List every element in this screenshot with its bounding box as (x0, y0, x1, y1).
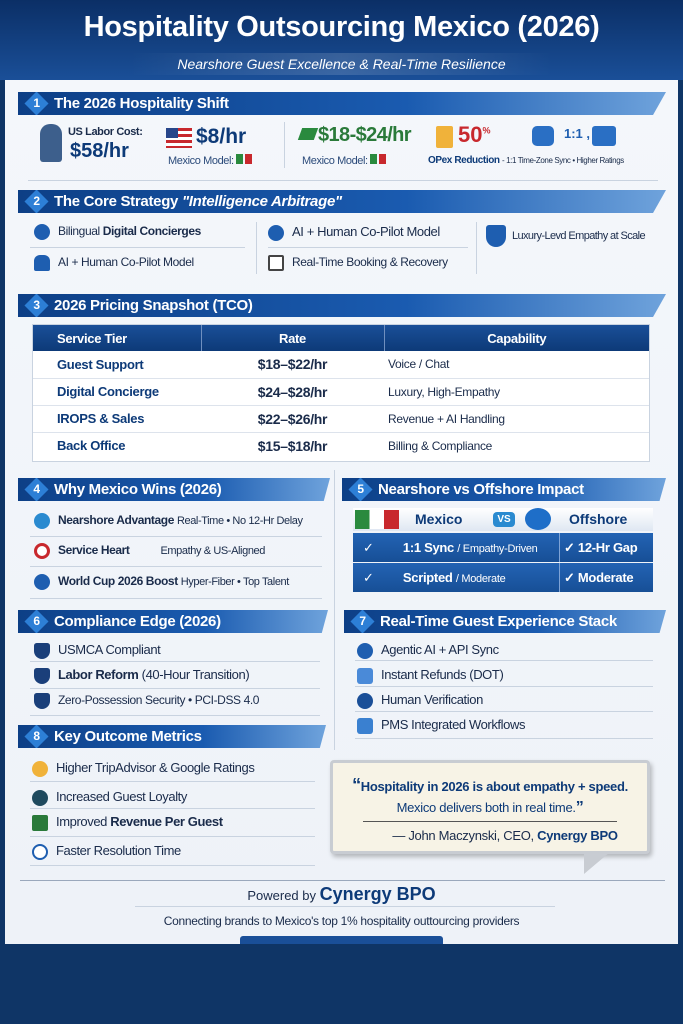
pricing table: Back Office (57, 438, 125, 453)
row: scripted: ✓ Scripted / Moderate (363, 570, 505, 585)
pricing table: Capability (487, 330, 546, 346)
comparison table (353, 508, 653, 592)
section 1 stats: Mexico Model: (302, 155, 368, 167)
item: world cup: World Cup 2026 Boost Hyper-Fiber • Top Talent (58, 574, 289, 588)
section 3 heading: 3 (33, 298, 40, 312)
item: copilot 2: AI + Human Co-Pilot Model (292, 224, 440, 239)
section 5 heading (342, 478, 666, 501)
icon: document (436, 126, 453, 148)
item: agentic: Agentic AI + API Sync (381, 642, 499, 657)
icon: worker (40, 124, 62, 162)
item: labor: Labor Reform (40-Hour Transition) (58, 667, 249, 682)
item: loyalty: Increased Guest Loyalty (56, 789, 187, 804)
pricing table: Voice / Chat (388, 357, 449, 371)
footer: tagline: Connecting brands to Mexico's top 1% hospitality outtourcing providers (164, 914, 519, 928)
icon: mexico map (298, 128, 318, 140)
section 8 heading (18, 725, 326, 748)
pricing table: Billing & Compliance (388, 439, 492, 453)
section 1 stats: US Labor Cost: (68, 126, 142, 138)
item: empathy: Luxury-Levd Empathy at Scale (512, 230, 645, 242)
item: empathy (486, 225, 646, 247)
header (0, 0, 683, 80)
pricing table (32, 324, 650, 462)
section 4 heading: Why Mexico Wins (2026) (54, 481, 221, 498)
pricing table: Luxury, High-Empathy (388, 384, 500, 398)
section 6 heading: Compliance Edge (2026) (54, 613, 221, 630)
section 8 heading: 8 (33, 729, 40, 743)
section 5 heading: 5 (357, 482, 364, 496)
section 2 items (30, 222, 646, 274)
item: resolution: Faster Resolution Time (56, 843, 181, 858)
section 3 heading: 2026 Pricing Snapshot (TCO) (54, 297, 253, 314)
item: security: Zero-Possession Security • PCI-DSS 4.0 (58, 693, 259, 707)
section 1 stats: Mexico Model: (168, 155, 234, 167)
callout: quote: Mexico delivers both in real time.” (397, 799, 583, 816)
callout: quote: “Hospitality in 2026 is about empathy + speed. (352, 775, 628, 795)
footer: powered by: Powered by Cynergy BPO (247, 884, 436, 904)
section 1 heading: 1 (33, 96, 40, 110)
pricing table: Revenue + AI Handling (388, 412, 505, 426)
section 8 items (30, 760, 315, 866)
section 2 heading: The Core Strategy "Intelligence Arbitrage" (54, 193, 342, 210)
section 1 stats: 1:1 , (564, 126, 590, 141)
section 1 stats: OPex Reduction - 1:1 Time-Zone Sync • Higher Ratings (428, 155, 624, 166)
section 5 heading: Nearshore vs Offshore Impact (378, 481, 584, 498)
pricing table: $15–$18/hr (258, 438, 327, 454)
section 8 heading: Key Outcome Metrics (54, 728, 202, 745)
section 7 items (355, 642, 653, 739)
subtitle (130, 53, 553, 75)
section 2 heading: 2 (33, 194, 40, 208)
pricing table: Guest Support (57, 357, 143, 372)
row: sync (353, 533, 653, 562)
pricing table: Digital Concierge (57, 384, 159, 399)
item: copilot: AI + Human Co-Pilot Model (58, 255, 194, 269)
item: booking: Real-Time Booking & Recovery (292, 255, 448, 269)
section 2 heading (18, 190, 666, 213)
item: verification: Human Verification (381, 692, 483, 707)
section 1 stats: 50% (458, 122, 490, 147)
section 1 heading: The 2026 Hospitality Shift (54, 95, 229, 112)
pricing table: Service Tier (57, 330, 127, 346)
section 4 heading (18, 478, 330, 501)
section 3 heading (18, 294, 666, 317)
callout: quote (330, 760, 650, 854)
callout: quote: — John Maczynski, CEO, Cynergy BPO (392, 828, 618, 843)
header row: Mexico (415, 511, 462, 527)
section 1 stats: $8/hr (196, 125, 246, 148)
item: nearshore: Nearshore Advantage Real-Time • No 12-Hr Delay (58, 513, 303, 527)
section 1 stats: $18-$24/hr (318, 124, 411, 146)
item: pms: PMS Integrated Workflows (381, 717, 525, 732)
row: scripted: ✓ Moderate (564, 570, 633, 585)
row: scripted (353, 563, 653, 592)
header row: VS (497, 514, 511, 525)
section 7 heading: 7 (359, 614, 366, 628)
header row (353, 508, 653, 531)
pricing table: Rate (279, 330, 306, 346)
pricing table: $24–$28/hr (258, 384, 327, 400)
row: sync: ✓ 1:1 Sync / Empathy-Driven (363, 540, 537, 555)
pricing table: $22–$26/hr (258, 410, 327, 426)
icons: sync (532, 126, 554, 146)
pricing table: IROPS & Sales (57, 411, 144, 426)
header row: Offshore (569, 511, 627, 527)
item: ratings: Higher TripAdvisor & Google Ratings (56, 760, 254, 775)
section 4 items (30, 513, 322, 599)
subtitle: Nearshore Guest Excellence & Real-Time Resilience (177, 56, 506, 72)
section 6 heading: 6 (33, 614, 40, 628)
section 1 heading (18, 92, 666, 115)
title: Hospitality Outsourcing Mexico (2026) (84, 11, 599, 43)
item: refunds: Instant Refunds (DOT) (381, 667, 503, 682)
section 1 stats (40, 122, 624, 168)
section 4 heading: 4 (33, 482, 40, 496)
item: revenue: Improved Revenue Per Guest (56, 814, 223, 829)
item: heart: Service Heart Empathy & US-Aligned (58, 543, 265, 557)
icon: US flag (166, 128, 192, 148)
section 6 items (30, 642, 320, 716)
section 7 heading (344, 610, 666, 633)
section 6 heading (18, 610, 328, 633)
item: usmca: USMCA Compliant (58, 642, 160, 657)
section 1 stats: $58/hr (70, 140, 129, 162)
item: concierges: Bilingual Digital Concierges (58, 224, 201, 238)
pricing table: $18–$22/hr (258, 356, 327, 372)
row: sync: ✓ 12-Hr Gap (564, 540, 637, 555)
section 7 heading: Real-Time Guest Experience Stack (380, 613, 617, 630)
